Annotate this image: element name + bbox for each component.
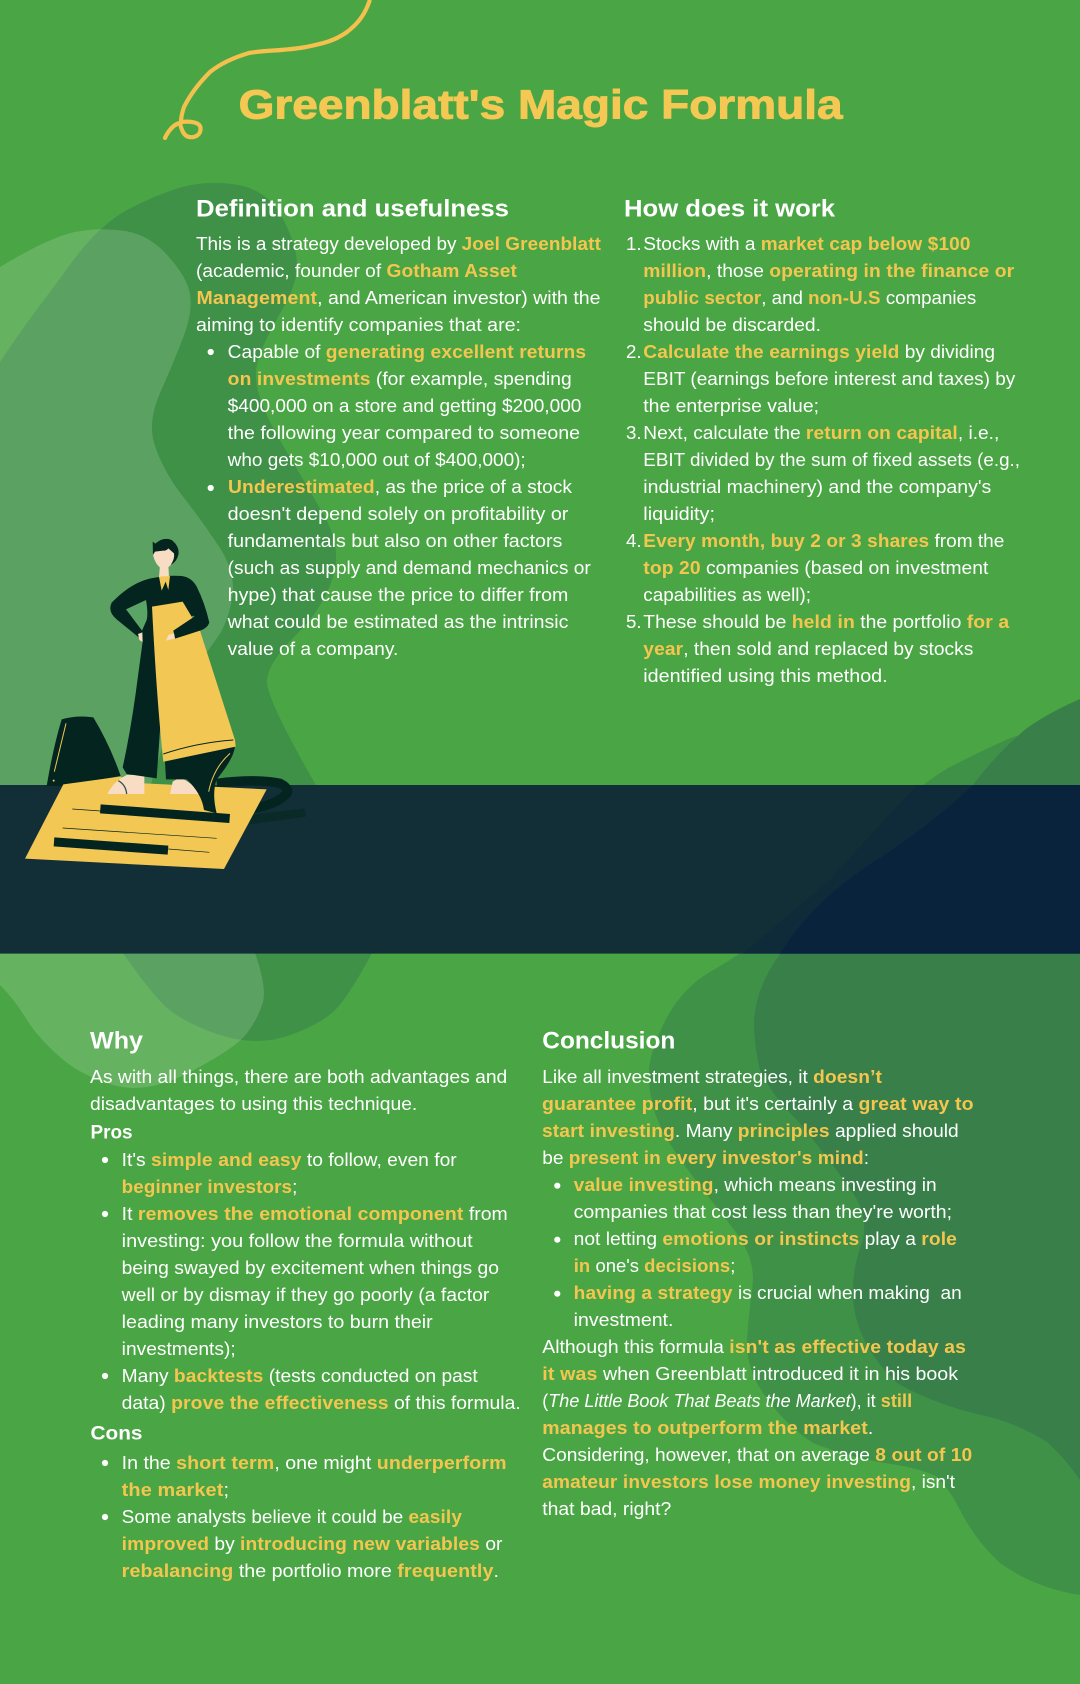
bullet: underestimated: hype) that cause the price to differ from	[228, 584, 568, 605]
bullet: underestimated: Underestimated, as the price of a stock	[228, 476, 573, 497]
step 3	[626, 422, 1020, 524]
closing paragraph: Although this formula isn't as effective today as	[542, 1336, 966, 1357]
bullet: excellent returns: Capable of generating excellent returns	[228, 341, 586, 362]
intro paragraph: disadvantages to using this technique.	[90, 1093, 417, 1114]
bullet: underestimated: value of a company.	[228, 638, 398, 659]
heading: conclusion: Conclusion	[542, 1028, 675, 1054]
intro paragraph: As with all things, there are both advantages and	[90, 1066, 507, 1087]
bullet: having a strategy	[554, 1282, 962, 1330]
bullet: new variables	[102, 1506, 502, 1581]
step 1: should be discarded.	[643, 314, 821, 335]
closing paragraph: Considering, however, that on average 8 out of 10	[542, 1444, 972, 1465]
bullet: simple and easy: beginner investors;	[122, 1176, 297, 1197]
closing paragraph: amateur investors lose money investing , isn't	[542, 1471, 956, 1492]
step 4: capabilities as well);	[643, 584, 811, 605]
bullet: new variables: Some analysts believe it could be easily	[122, 1506, 462, 1527]
step 5: 5.	[626, 611, 642, 632]
bullet: backtests	[102, 1365, 521, 1413]
title: Greenblatt's Magic Formula	[239, 82, 844, 128]
decorative curl	[165, 1, 370, 138]
blob: right dark	[754, 699, 1080, 1480]
closing paragraph: that bad, right?	[542, 1498, 671, 1519]
step 5: These should be held in the portfolio for a	[643, 611, 1010, 632]
bullet: backtests: Many backtests (tests conducted on past	[122, 1365, 479, 1386]
step 1: Stocks with a market cap below $100	[643, 233, 971, 254]
closing paragraph	[542, 1336, 972, 1519]
bullet: emotions or instincts: not letting emotions or instincts play a role	[574, 1228, 957, 1249]
closing paragraph: (The Little Book That Beats the Market), it still	[542, 1390, 912, 1411]
bullet: underestimated: fundamentals but also on other factors	[228, 530, 562, 551]
intro paragraph: guarantee profit , but it's certainly a great way to	[542, 1093, 974, 1114]
icon: rope shadow and coil	[217, 781, 306, 824]
step 1: million, those operating in the finance or	[643, 260, 1014, 281]
illustration: person standing on a document	[25, 539, 306, 869]
blob: top left light	[0, 229, 233, 787]
icon: dark cone object	[47, 717, 121, 786]
heading: definition: Definition and usefulness	[196, 196, 509, 222]
panel: definition and usefulness	[196, 196, 601, 659]
icon: person	[107, 539, 236, 813]
bullet: emotional component: being swayed by excitement when things go	[122, 1257, 499, 1278]
blob: top left dark	[0, 183, 336, 787]
bullet: underestimated	[208, 476, 591, 659]
bullet: having a strategy: having a strategy is crucial when making an	[574, 1282, 962, 1303]
step 3: liquidity;	[643, 503, 715, 524]
heading: how does it work: How does it work	[624, 196, 836, 222]
panel: how does it work	[624, 196, 1020, 686]
bullet: underestimated: (such as supply and demand mechanics or	[228, 557, 591, 578]
intro paragraph: Like all investment strategies, it doesn’t	[542, 1066, 882, 1087]
step 1: 1.	[626, 233, 642, 254]
blob: lower left dark	[123, 953, 372, 1041]
bullet: emotional component: well or by dismay if they go poorly (a factor	[121, 1284, 489, 1305]
bullet: excellent returns: the following year compared to someone	[228, 422, 580, 443]
bullet: new variables: rebalancing the portfolio more frequently .	[122, 1560, 499, 1581]
bullet: emotions or instincts: in one's decisions;	[574, 1255, 735, 1276]
step 4: 4.	[626, 530, 642, 551]
icon: yellow document with lines	[25, 777, 267, 869]
bullet: short term	[102, 1452, 507, 1500]
bullet: emotional component: leading many investors to burn their	[122, 1311, 433, 1332]
bullet: underestimated: doesn't depend solely on profitability or	[228, 503, 568, 524]
step 1: public sector, and non-U.S companies	[643, 287, 976, 308]
dark horizontal band	[0, 785, 1080, 954]
bullet: value investing: value investing, which means investing in	[574, 1174, 937, 1195]
bullet: emotional component: investing: you follow the formula without	[122, 1230, 474, 1251]
heading: why: Why	[90, 1028, 143, 1054]
step 1	[626, 233, 1014, 335]
bullet: emotional component: It removes the emotional component from	[122, 1203, 508, 1224]
step 3: EBIT divided by the sum of fixed assets (e.g.,	[643, 449, 1020, 470]
bullet: short term: the market ;	[122, 1479, 229, 1500]
bullet: excellent returns: $400,000 on a store and getting $200,000	[228, 395, 581, 416]
subheading: cons: Cons	[90, 1422, 143, 1444]
step 4	[626, 530, 1004, 605]
panel: conclusion	[542, 1028, 974, 1519]
bullet: value investing	[554, 1174, 952, 1222]
intro paragraph: aiming to identify companies that are:	[196, 314, 521, 335]
step 5	[626, 611, 1010, 686]
bullet: having a strategy: investment.	[574, 1309, 673, 1330]
bullet: backtests: data) prove the effectiveness of this formula.	[122, 1392, 521, 1413]
intro paragraph: This is a strategy developed by Joel Greenblatt	[196, 233, 601, 254]
bullet: simple and easy: It's simple and easy to follow, even for	[122, 1149, 457, 1170]
step 5: identified using this method.	[643, 665, 888, 686]
step 2: EBIT (earnings before interest and taxes) by	[643, 368, 1016, 389]
bullet: value investing: companies that cost less than they're worth;	[574, 1201, 952, 1222]
step 4: top 20 companies (based on investment	[643, 557, 989, 578]
bullet: simple and easy	[102, 1149, 457, 1197]
blob: lower left light	[0, 953, 264, 1088]
intro paragraph: Management , and American investor) with the	[196, 287, 600, 308]
bullet: emotional component: investments);	[122, 1338, 236, 1359]
bullet: underestimated: what could be estimated as the intrinsic	[227, 611, 568, 632]
intro paragraph: be present in every investor's mind :	[542, 1147, 869, 1168]
bullet: short term: In the short term, one might underperform	[122, 1452, 507, 1473]
intro paragraph	[196, 233, 601, 335]
step 2: 2.	[626, 341, 642, 362]
intro paragraph	[90, 1066, 507, 1114]
step 4: Every month, buy 2 or 3 shares from the	[643, 530, 1004, 551]
step 3: Next, calculate the return on capital, i.e.,	[643, 422, 999, 443]
closing paragraph: it was when Greenblatt introduced it in his book	[542, 1363, 959, 1384]
bullet: excellent returns: on investments (for example, spending	[228, 368, 572, 389]
intro paragraph: (academic, founder of Gotham Asset	[196, 260, 517, 281]
step 3: industrial machinery) and the company's	[643, 476, 991, 497]
bullet: excellent returns	[208, 341, 586, 470]
bullet: new variables: improved by introducing new variables or	[122, 1533, 502, 1554]
step 2	[626, 341, 1016, 416]
blob: right medium	[649, 732, 1080, 1595]
step 5: year, then sold and replaced by stocks	[643, 638, 973, 659]
step 3: 3.	[626, 422, 642, 443]
closing paragraph: manages to outperform the market .	[542, 1417, 873, 1438]
bullet: emotions or instincts	[554, 1228, 957, 1276]
step 2: the enterprise value;	[643, 395, 819, 416]
intro paragraph	[542, 1066, 974, 1168]
bullet: excellent returns: who gets $10,000 out of $400,000);	[227, 449, 526, 470]
intro paragraph: start investing. Many principles applied should	[542, 1120, 959, 1141]
subheading: pros: Pros	[90, 1122, 133, 1144]
bullet: emotional component	[102, 1203, 508, 1359]
step 2: Calculate the earnings yield by dividing	[643, 341, 995, 362]
panel: why	[90, 1028, 521, 1581]
